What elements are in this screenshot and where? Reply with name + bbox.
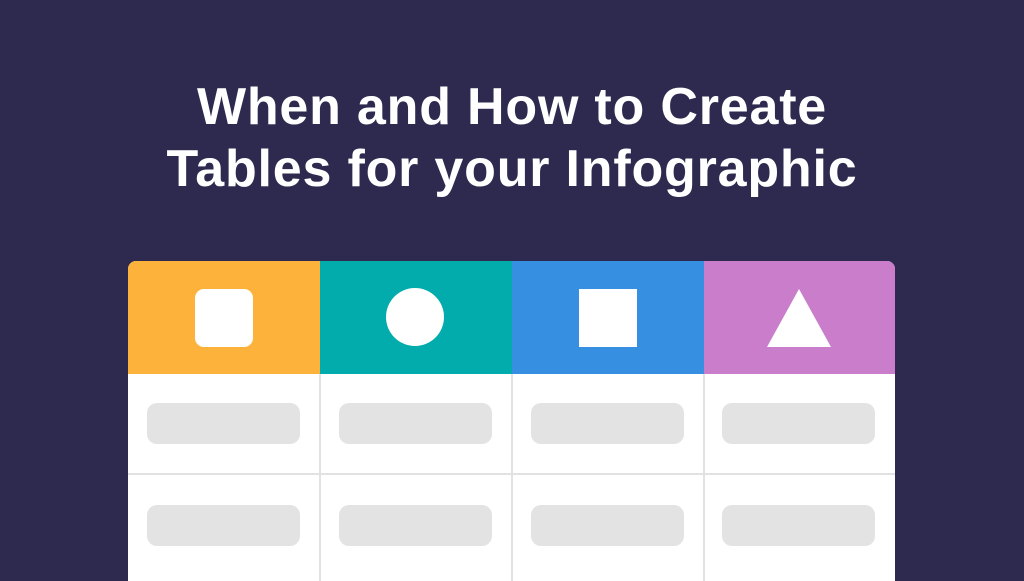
header: purple column [704,261,895,374]
row 1 placeholders [147,403,875,444]
header: orange column [128,261,320,374]
header: blue column [512,261,704,374]
header: teal column [320,261,512,374]
title: Tables for your Infographic [167,140,857,198]
title [167,78,857,198]
title: When and How to Create [197,78,827,136]
row 2 placeholders [147,505,875,546]
table [128,261,895,581]
